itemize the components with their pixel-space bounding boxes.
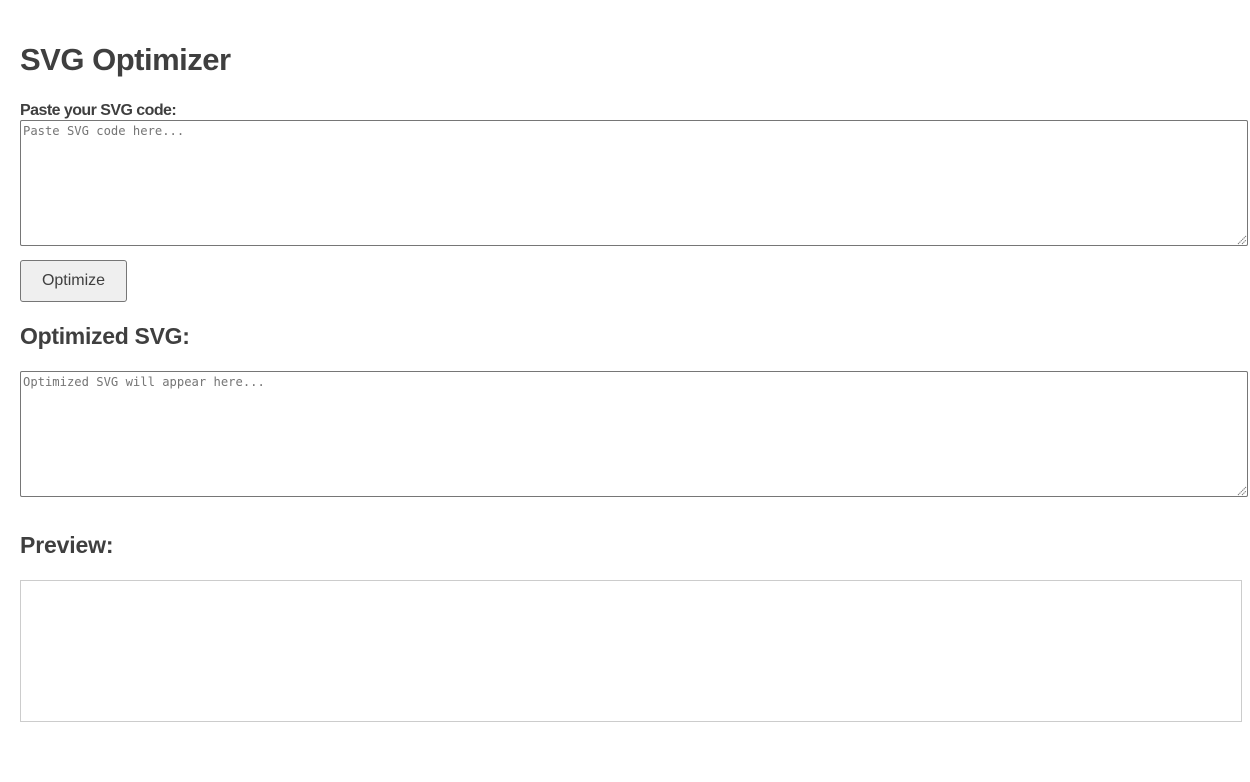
output resize handle — [1238, 486, 1246, 496]
optimize button: Optimize — [42, 272, 105, 289]
optimize button — [20, 260, 127, 302]
output placeholder: Optimized SVG will appear here... — [23, 375, 265, 389]
preview heading: Preview: — [20, 532, 113, 558]
input label: Paste your SVG code: — [20, 102, 176, 119]
resize handle — [1238, 236, 1246, 244]
preview panel — [20, 580, 1242, 722]
output textarea — [20, 371, 1248, 497]
input placeholder: Paste SVG code here... — [23, 124, 184, 138]
output heading: Optimized SVG: — [20, 323, 190, 349]
input textarea — [20, 120, 1248, 246]
title: SVG Optimizer — [20, 42, 231, 77]
